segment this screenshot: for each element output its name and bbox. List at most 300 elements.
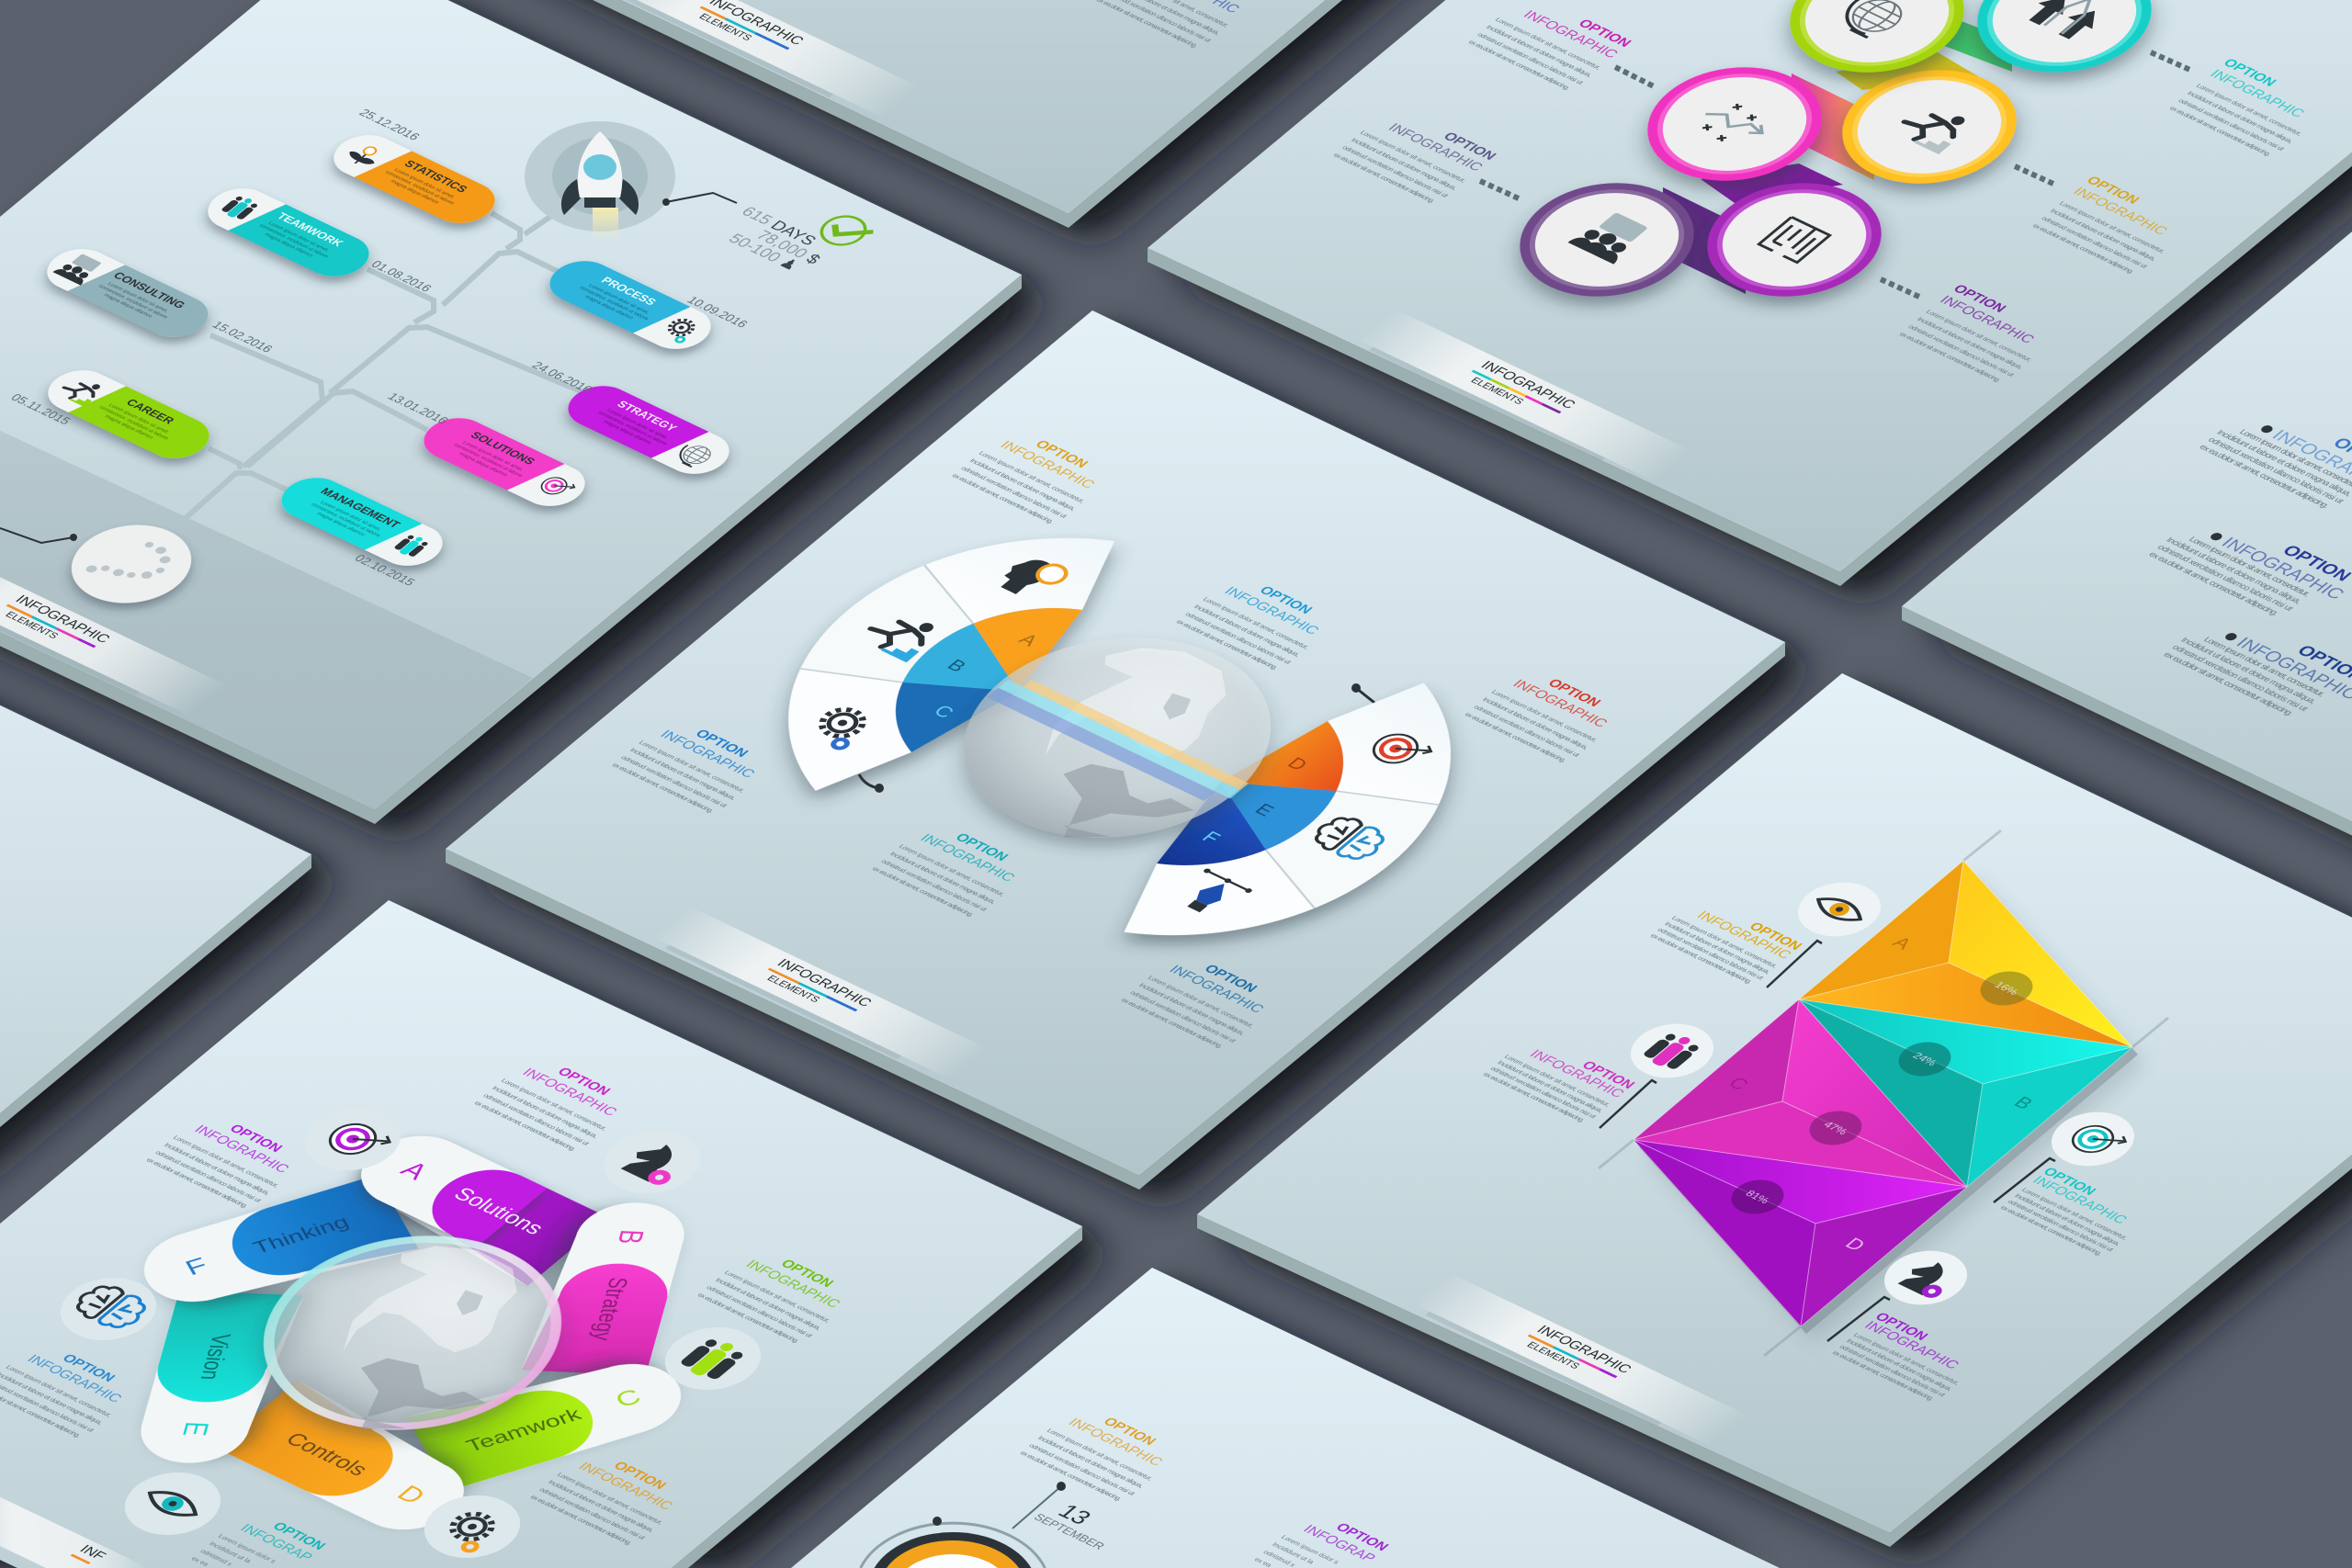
text block: option violet: OPTION [1440, 130, 1499, 163]
stats text: 78,000 $ [752, 227, 824, 266]
text block: option purple: Lorem ipsum dolor s [1279, 1534, 1341, 1565]
letters: A [1014, 631, 1042, 649]
text block: option magenta: Lorem ipsum dolor sit amet, consectetur, [1493, 17, 1603, 71]
tab C: teamwork: C [611, 1385, 646, 1413]
segment B colour [895, 620, 1054, 721]
panel: circles [1148, 0, 2352, 586]
text block: option magenta: ex ea.dolor sit amet, consectetur adipiscing. [1466, 39, 1572, 91]
segment F white [1092, 822, 1341, 981]
pill: teamwork: magna aliqua ullamco [263, 232, 314, 258]
text block: option teal: INFOGRAP [237, 1522, 316, 1564]
text block: option purple [1830, 1310, 1987, 1404]
pill: strategy: consectetur, incididunt ut labore [596, 411, 668, 446]
text block: option orange: Lorem ipsum dolor sit amet, consectetur, [1045, 1427, 1155, 1482]
text block: option cyan: Incididunt ut labore et dolore magna aliqua, [2013, 1192, 2122, 1247]
icon: brain [1306, 812, 1393, 864]
pill: career: Lorem ipsum dolor sit amet, [107, 403, 171, 435]
text block: option two: odnistrud xercitation ullamco laboris nisi ut [2154, 543, 2296, 613]
percent: 16% [1970, 964, 2043, 1012]
text block: option teal [189, 1506, 329, 1568]
text block: option dark blue: Lorem ipsum dolor sit amet, consectetur, [1146, 975, 1256, 1029]
text block: option teal: odnistrud xercitation ullamco laboris nisi ut [879, 858, 989, 912]
text block: option purple: Incididunt ut labore et dolore magna aliqua, [1845, 1337, 1954, 1393]
text block: option cyan: INFOGRAPHIC [2029, 1174, 2131, 1226]
text block: option cyan: OPTION [2220, 56, 2279, 89]
triangle D [1634, 1140, 1967, 1326]
text block: option magenta: OPTION [1578, 1059, 1638, 1091]
tab F: thinking: Thinking [250, 1213, 353, 1258]
text block: option teal: OPTION [952, 831, 1012, 863]
segment dividers [800, 565, 1000, 705]
text block: option cyan: Lorem ipsum dolor sit amet, consectetur, [2194, 83, 2304, 137]
text block: option teal: INFOGRAPHIC [917, 831, 1018, 885]
footer label: wheel: INFOGRAPHIC [774, 957, 875, 1010]
icon badge: people [1614, 1013, 1730, 1089]
text block: option purple: OPTION [1871, 1310, 1931, 1343]
bracket lines [1600, 941, 2055, 1341]
pill: career [35, 363, 222, 466]
text block: option purple: Incididunt ut la [1271, 1541, 1317, 1565]
text block: option cyan: ex ea.dolor sit amet, consectetur adipiscing. [2167, 105, 2273, 157]
triangle letters: B [2009, 1094, 2037, 1112]
icon: green check [813, 211, 877, 252]
date: 13 [1052, 1500, 1098, 1529]
pill: solutions: magna aliqua ullamco [458, 452, 508, 478]
text block: option sky [1174, 570, 1342, 672]
tab A: solutions [328, 1122, 609, 1286]
date leader [1012, 1482, 1066, 1529]
tab A label: Solutions [448, 1184, 549, 1238]
text block: option teal [870, 817, 1038, 919]
text block: option magenta: Incididunt ut labore et dolore magna aliqua, [491, 1085, 600, 1139]
text block: option three [2161, 603, 2352, 730]
text block: option cyan: Incididunt ut labore et dolore magna aliqua, [2186, 90, 2295, 144]
text block: option orange: odnistrud xercitation ullamco laboris nisi ut [1656, 926, 1766, 981]
pill: teamwork: TEAMWORK [274, 210, 346, 249]
text block: option cyan: odnistrud xercitation ullamco laboris nisi ut [2006, 1198, 2116, 1253]
icon badge: gear [405, 1483, 539, 1568]
text block: option blue partial [1094, 0, 1249, 51]
text block: option magenta: INFOGRAPHIC [1526, 1048, 1627, 1100]
pill: consulting [34, 242, 221, 344]
text block: option teal: odnistrud x [198, 1548, 235, 1567]
text block: option purple: OPTION [1950, 282, 2009, 315]
text block: option magenta: OPTION [554, 1066, 614, 1098]
pill: statistics [321, 128, 508, 231]
percent: 24% [1888, 1035, 1962, 1083]
connecting bands [987, 672, 1249, 808]
panel: top middle [376, 0, 1715, 228]
glass globe [204, 1199, 621, 1467]
date: process: 10.09.2016 [684, 294, 751, 330]
segment E white [1239, 769, 1453, 915]
start ball with dots [47, 510, 216, 618]
icon badge: eye [106, 1461, 240, 1547]
text block: option magenta: OPTION [1575, 17, 1634, 50]
text block: option red: Lorem ipsum dolor sit amet, consectetur, [1489, 689, 1600, 743]
text block: option dark blue: ex ea.dolor sit amet, consectetur adipiscing. [1119, 997, 1225, 1049]
text block: option teal: Lorem ipsum dolor sit amet, consectetur, [897, 843, 1007, 897]
letters: C [929, 702, 958, 722]
ball dot [70, 534, 77, 541]
text block: option sky: odnistrud xercitation ullamco laboris nisi ut [1183, 611, 1294, 665]
pill: solutions: SOLUTIONS [468, 430, 537, 467]
pill: management: consectetur, incididunt ut labore [310, 502, 381, 538]
rocket [525, 121, 675, 241]
tab C: teamwork: Teamwork [463, 1404, 586, 1456]
text block: option purple [1897, 282, 2065, 385]
text block: option orange: ex ea.dolor sit amet, consectetur adipiscing. [528, 1494, 634, 1546]
text block: option magenta [472, 1051, 640, 1154]
text block: option yellow: odnistrud xercitation ullamco laboris nisi ut [2040, 215, 2150, 269]
text block: option teal: OPTION [269, 1520, 329, 1552]
text block: option three: odnistrud xercitation ullamco laboris nisi ut [2169, 643, 2311, 713]
connector bars [1663, 6, 2012, 294]
tab B: strategy: Strategy [587, 1277, 633, 1341]
pill: consulting: consectetur, incididunt ut labore [96, 284, 168, 320]
tab E: vision [132, 1290, 303, 1466]
stats text: 50-100 ♟ [725, 231, 803, 273]
pill: teamwork [195, 181, 382, 284]
text block: option orange: Incididunt ut labore et dolore magna aliqua, [1036, 1435, 1146, 1489]
text block: option one [2197, 395, 2352, 523]
text block: option two [2146, 502, 2352, 630]
pin: left [859, 774, 884, 793]
text block: option teal: Incididunt ut labore et dolore magna aliqua, [888, 851, 998, 905]
triangle letters: A [1888, 934, 1916, 953]
footer label: circles: ELEMENTS [1468, 376, 1526, 406]
ball line [0, 528, 74, 543]
text block: option purple: Lorem ipsum dolor sit amet, consectetur, [1924, 309, 2034, 363]
text block: option magenta: INFOGRAPHIC [519, 1066, 620, 1119]
tab C: teamwork [406, 1342, 696, 1491]
text block: option sky: ex ea.dolor sit amet, consectetur adipiscing. [1174, 618, 1280, 671]
text block: option blue: INFOGRAPHIC [24, 1352, 125, 1405]
text block: option orange: Lorem ipsum dolor sit amet, consectetur, [555, 1472, 665, 1526]
triangle letters [1724, 934, 2037, 1255]
text block: option purple: ex ea.dolor sit amet, consectetur adipiscing. [1897, 331, 2003, 383]
letters: E [1250, 801, 1278, 819]
icon badge: knight [1868, 1240, 1984, 1315]
text block: option purple: OPTION [1332, 1521, 1392, 1553]
icon badge: eye [1781, 872, 1897, 947]
footer label: circles: INFOGRAPHIC [1477, 359, 1578, 412]
pill: management: magna aliqua ullamco [315, 512, 366, 537]
percent: 24%: 24% [1910, 1050, 1940, 1068]
segment C white [713, 647, 961, 806]
letters: D [1283, 754, 1312, 774]
text block: option cyan: ex ea.dolor sit amet, consectetur adipiscing. [1998, 1204, 2105, 1257]
pill: statistics: consectetur, incididunt ut labore [383, 170, 455, 206]
text block: option green: odnistrud xercitation ullamco laboris nisi ut [705, 1284, 815, 1338]
footer band: ring [0, 1494, 149, 1568]
footer label: triangles: ELEMENTS [1524, 1340, 1582, 1371]
text block: option magenta: INFOGRAPHIC [1520, 8, 1621, 61]
text block: option green: INFOGRAPHIC [742, 1258, 843, 1311]
text block: option purple: INFOGRAPHIC [1860, 1319, 1962, 1371]
footer label: top middle: ELEMENTS [696, 12, 754, 42]
text block: option red: odnistrud xercitation ullamco laboris nisi ut [1472, 704, 1582, 758]
arc dot [933, 1517, 942, 1526]
connectors [169, 209, 585, 533]
segment C colour [853, 653, 1018, 762]
text block: option blue: OPTION [59, 1352, 119, 1384]
text block: option violet: odnistrud xercitation ullamco laboris nisi ut [1340, 144, 1451, 198]
letters: F [1197, 829, 1225, 847]
percent: 47% [1799, 1104, 1872, 1152]
text block: option blue: Incididunt ut labore et dolore magna aliqua, [628, 747, 738, 801]
text block: option magenta: Lorem ipsum dolor sit amet, consectetur, [1502, 1054, 1612, 1108]
slot shadows [1599, 830, 2168, 1356]
footer label: timeline: ELEMENTS [3, 610, 61, 640]
stats text [712, 204, 837, 277]
text block: option blue: odnistrud xercitation ullamco laboris nisi ut [619, 754, 729, 808]
text block: option red [1463, 662, 1631, 765]
text block: option orange: OPTION [1746, 920, 1805, 953]
segment A white [898, 492, 1147, 651]
text block: option teal: Incididunt ut la [208, 1540, 254, 1564]
panel: triangles [1197, 673, 2352, 1547]
text block: option dark blue: Incididunt ut labore et dolore magna aliqua, [1137, 982, 1247, 1036]
text block: option yellow: OPTION [2083, 174, 2143, 207]
pill: process: consectetur, incididunt ut labore [578, 286, 650, 321]
footer label: wheel: ELEMENTS [764, 974, 822, 1004]
date: strategy: 24.06.2016 [529, 359, 595, 395]
stats text: 615 DAYS [738, 204, 820, 248]
text block: option orange: odnistrud xercitation ullamco laboris nisi ut [1027, 1442, 1137, 1496]
pill: consulting: CONSULTING [110, 270, 188, 310]
pill: process: Lorem ipsum dolor sit amet, [587, 284, 650, 315]
text block: option three: Incididunt ut labore et dolore magna aliqua, [2178, 637, 2319, 705]
text block: option purple [144, 1108, 312, 1211]
segment B white [786, 558, 1000, 705]
text block: option magenta: odnistrud xercitation ullamco laboris nisi ut [1488, 1065, 1599, 1120]
pill: teamwork: consectetur, incididunt ut labore [257, 223, 329, 259]
text block: option orange: OPTION [1032, 438, 1091, 470]
panel: ring [0, 900, 1082, 1568]
right fan [1071, 658, 1541, 988]
text block: option yellow: ex ea.dolor sit amet, consectetur adipiscing. [2030, 222, 2136, 275]
text block: option orange: Incididunt ut labore et dolore magna aliqua, [547, 1479, 656, 1533]
triangle C [1634, 999, 1967, 1187]
text block: option orange: odnistrud xercitation ullamco laboris nisi ut [959, 465, 1069, 519]
pin: right [1351, 683, 1374, 703]
text block: option orange: Incididunt ut labore et dolore magna aliqua, [1663, 920, 1772, 976]
footer label: wheel [649, 907, 988, 1083]
panel: bottom [791, 1268, 1780, 1568]
text block: option purple: Incididunt ut labore et dolore magna aliqua, [1916, 316, 2025, 370]
tab D: controls: Controls [280, 1429, 373, 1480]
text block: option blue: ex ea.dolor sit amet, consectetur adipiscing. [610, 761, 716, 814]
text block: option one: Incididunt ut labore et dolore magna aliqua, [2214, 429, 2352, 498]
text block: option orange: INFOGRAPHIC [997, 438, 1098, 491]
text block: option red: OPTION [1544, 677, 1604, 709]
text block: option magenta: ex ea.dolor sit amet, consectetur adipiscing. [472, 1100, 578, 1152]
pill: strategy: STRATEGY [614, 399, 680, 434]
pill: statistics: magna aliqua ullamco [389, 179, 440, 205]
pill: management: MANAGEMENT [318, 486, 403, 530]
text block: option purple: Incididunt ut labore et dolore magna aliqua, [163, 1142, 272, 1196]
text block: option orange [950, 423, 1118, 526]
pill: management: Lorem ipsum dolor sit amet, [319, 501, 382, 532]
pill: process: magna aliqua ullamco [583, 295, 634, 321]
text block: option dark blue [1119, 948, 1287, 1051]
text block: option dark blue: odnistrud xercitation ullamco laboris nisi ut [1128, 989, 1238, 1043]
text block: option green: Incididunt ut labore et dolore magna aliqua, [714, 1277, 823, 1331]
segment dividers [1239, 769, 1439, 908]
text block: option red: ex ea.dolor sit amet, consectetur adipiscing. [1463, 711, 1568, 763]
letters: B [943, 657, 970, 675]
text block: option magenta: Lorem ipsum dolor sit amet, consectetur, [499, 1077, 609, 1132]
text block: option orange: Lorem ipsum dolor sit amet, consectetur, [977, 450, 1087, 504]
donut chart partial [861, 1523, 1045, 1568]
text block: option orange: Incididunt ut labore et dolore magna aliqua, [968, 457, 1078, 512]
footer label: timeline [0, 543, 226, 719]
text block: option blue: OPTION [692, 728, 752, 760]
pill: management [268, 470, 456, 573]
text block: option orange [1018, 1401, 1186, 1504]
pill: consulting: magna aliqua ullamco [102, 293, 153, 319]
text block: option magenta: ex ea.dolor sit amet, consectetur adipiscing. [1481, 1071, 1588, 1123]
text block: option blue: Lorem ipsum dolor sit amet, consectetur, [4, 1364, 114, 1418]
pill: teamwork: Lorem ipsum dolor sit amet, [266, 221, 331, 254]
circle: dark purple people [1484, 161, 1730, 319]
icon: pen [1170, 868, 1253, 920]
pill: career: CAREER [123, 397, 177, 426]
text block: option purple: INFOGRAP [1300, 1523, 1379, 1565]
text block: option purple: odnistrud x [1261, 1549, 1298, 1568]
letters [929, 631, 1312, 847]
triangle letters: C [1724, 1074, 1753, 1094]
text block: option cyan: OPTION [2040, 1165, 2099, 1198]
footer label: ring: INF [76, 1543, 109, 1562]
panel: right list [1902, 68, 2352, 952]
text block: option purple: Lorem ipsum dolor sit amet, consectetur, [171, 1134, 281, 1189]
text block: option magenta: Incididunt ut labore et dolore magna aliqua, [1485, 24, 1594, 78]
text block: option violet: INFOGRAPHIC [1385, 121, 1486, 174]
text block: option cyan: INFOGRAPHIC [2207, 68, 2308, 120]
text block: option blue [610, 713, 778, 816]
dotted leaders [1480, 52, 2192, 298]
text block: option red: INFOGRAPHIC [1510, 677, 1611, 730]
text block: option three: ex ea.dolor sit amet, consectetur adipiscing. [2161, 650, 2296, 717]
text block: option teal: ex ea.dolor sit amet, consectetur adipiscing. [870, 865, 976, 918]
text block: option orange: odnistrud xercitation ullamco laboris nisi ut [537, 1486, 648, 1540]
text block: option sky: INFOGRAPHIC [1221, 584, 1322, 637]
text block: option dark blue: OPTION [1201, 963, 1261, 995]
percent: 47%: 47% [1821, 1119, 1851, 1137]
text block: option two: INFOGRAPHIC [2217, 535, 2348, 603]
glass globe [901, 599, 1333, 876]
date: solutions: 13.01.2016 [385, 390, 451, 426]
segment A colour [938, 581, 1103, 692]
text block: option two: ex ea.dolor sit amet, consectetur adipiscing. [2146, 550, 2281, 617]
icon badge: people [646, 1315, 780, 1402]
text block: option three: Lorem ipsum dolor sit amet, consectetur, [2201, 636, 2327, 699]
text block: option purple: ex ea.dolor sit amet, consectetur adipiscing. [144, 1156, 250, 1209]
text block: option blue [0, 1337, 145, 1440]
text block: option orange: OPTION [610, 1460, 670, 1492]
segment D white [1277, 668, 1526, 827]
text block: option purple: OPTION [226, 1122, 286, 1155]
text block: option red: Incididunt ut labore et dolore magna aliqua, [1481, 696, 1590, 750]
text block: option purple: Lorem ipsum dolor sit amet, consectetur, [1851, 1332, 1962, 1386]
stats dot [662, 198, 670, 206]
tab F: thinking: F [181, 1254, 212, 1280]
icon: target [1365, 729, 1434, 773]
date: statistics: 25.12.2016 [356, 107, 423, 142]
tab E: vision: E [175, 1421, 215, 1437]
text block: option magenta: Incididunt ut labore et dolore magna aliqua, [1496, 1059, 1605, 1114]
tab F: thinking [129, 1175, 419, 1324]
text block: option yellow: Incididunt ut labore et dolore magna aliqua, [2049, 208, 2158, 262]
text block: option purple: INFOGRAPHIC [1937, 294, 2038, 346]
date: teamwork: 01.08.2016 [368, 258, 435, 294]
tab B: strategy: B [610, 1229, 650, 1245]
text block: option orange: OPTION [1100, 1416, 1159, 1448]
icon badge: target [2035, 1101, 2151, 1177]
pill: process: PROCESS [598, 275, 659, 308]
text block: option purple: odnistrud xercitation ullamco laboris nisi ut [1838, 1343, 1948, 1398]
text block: option violet [1331, 103, 1499, 206]
date: consulting: 15.02.2016 [209, 319, 276, 355]
text block: option dark blue: INFOGRAPHIC [1166, 963, 1267, 1016]
percent: 81% [1721, 1173, 1794, 1221]
date: SEPTEMBER [1031, 1511, 1108, 1551]
tab E: vision: Vision [194, 1333, 236, 1381]
text block: option blue: Lorem ipsum dolor sit amet, consectetur, [637, 739, 747, 794]
circle: yellow runner [1806, 48, 2052, 206]
icon badge: brain [41, 1266, 175, 1352]
stats line [666, 193, 737, 203]
text block: option orange: INFOGRAPHIC [1693, 909, 1794, 962]
text block: option sky: Lorem ipsum dolor sit amet, consectetur, [1201, 596, 1311, 650]
footer label: triangles [1408, 1273, 1747, 1450]
pill: career: consectetur, incididunt ut labore [97, 405, 169, 441]
panel: far left blank [0, 523, 311, 1406]
icon: gear [806, 705, 876, 750]
pill: career: magna aliqua ullamco [103, 414, 154, 440]
pill: solutions [411, 411, 598, 513]
text block: option magenta: odnistrud xercitation ullamco laboris nisi ut [1476, 31, 1586, 85]
pill: statistics: Lorem ipsum dolor sit amet, [392, 168, 457, 200]
text block: option orange: INFOGRAPHIC [1065, 1416, 1166, 1469]
text block: option violet: Lorem ipsum dolor sit amet, consectetur, [1358, 130, 1468, 184]
panel: timeline [0, 0, 1022, 824]
text block: option green [695, 1243, 864, 1346]
text block: option two: Incididunt ut labore et dolore magna aliqua, [2164, 536, 2304, 605]
text block: option purple: ex ea.dolor sit amet, consectetur adipiscing. [1830, 1349, 1937, 1402]
text block: option green: ex ea.dolor sit amet, consectetur adipiscing. [695, 1292, 801, 1344]
segment E colour [1185, 752, 1344, 853]
text block: option orange [528, 1445, 696, 1548]
circle: purple maze [1671, 161, 1917, 319]
rhombus shadow [1639, 868, 2138, 1334]
pill: solutions: consectetur, incididunt ut labore [452, 443, 524, 479]
text block: option teal: Lorem ipsum dolor s [216, 1533, 278, 1564]
pill: statistics: STATISTICS [401, 158, 470, 195]
tab A letter: A [394, 1157, 434, 1184]
circle: green globe [1754, 0, 2000, 95]
pill: process [537, 254, 724, 356]
text block: option cyan [2167, 56, 2335, 159]
text block: option cyan [1998, 1165, 2155, 1258]
text block: option violet: ex ea.dolor sit amet, consectetur adipiscing. [1331, 152, 1437, 204]
text block: option purple: odnistrud xercitation ullamco laboris nisi ut [153, 1149, 264, 1203]
text block: option yellow [2030, 174, 2199, 276]
pill: strategy: Lorem ipsum dolor sit amet, [605, 409, 669, 440]
tab B: strategy [522, 1200, 693, 1376]
